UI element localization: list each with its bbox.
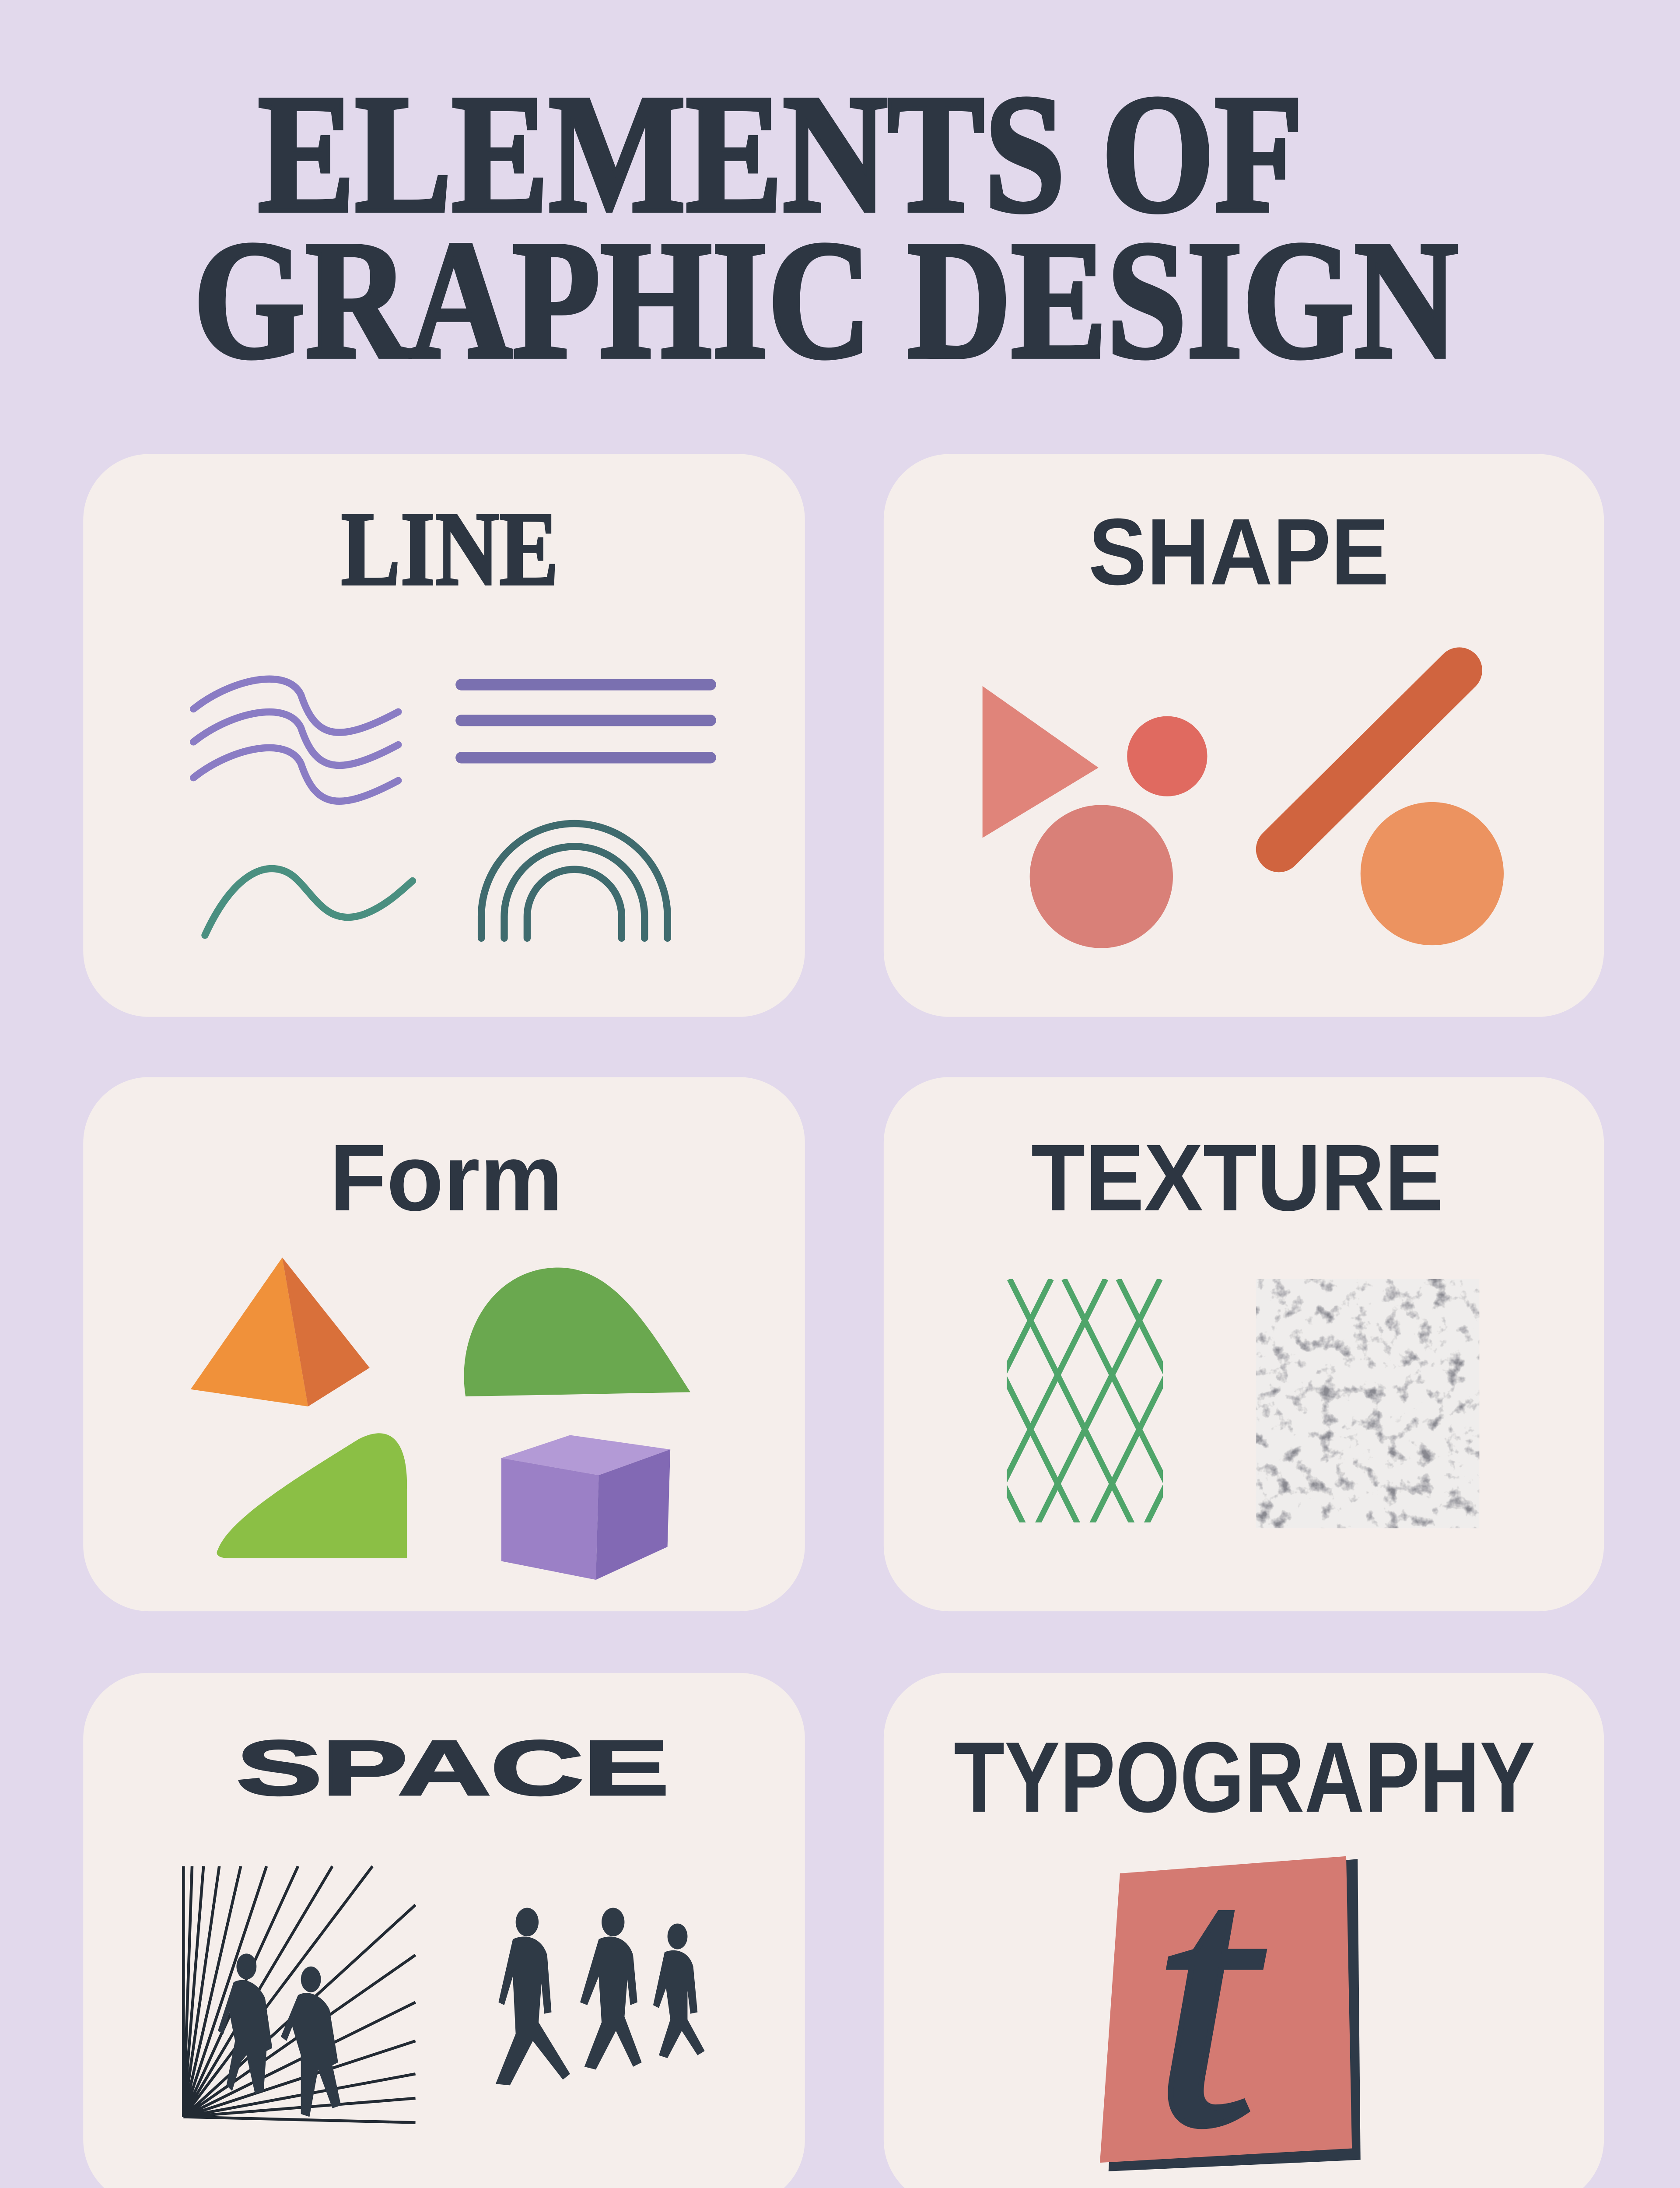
panel: line bbox=[83, 454, 805, 1017]
icon: wavy lines bbox=[193, 679, 398, 801]
icon: lattice bbox=[1007, 1279, 1163, 1523]
heading: space: SPACE bbox=[236, 1725, 669, 1811]
panel: typography bbox=[884, 1673, 1604, 2188]
icon: small circle bbox=[1127, 716, 1208, 796]
heading: shape: SHAPE bbox=[1088, 498, 1389, 604]
icon: arches bbox=[481, 824, 668, 938]
icon: grunge texture bbox=[1256, 1279, 1479, 1528]
icon: pill bbox=[1279, 670, 1460, 849]
icon: walking people bbox=[496, 1908, 705, 2085]
icon: wedge bbox=[217, 1433, 407, 1558]
panel: shape bbox=[884, 454, 1604, 1017]
icon: big circle bbox=[1030, 805, 1173, 948]
icon: perspective rays with figures bbox=[183, 1866, 416, 2123]
panel: space bbox=[83, 1673, 805, 2188]
icon: letter tile bbox=[1100, 1792, 1361, 2188]
panel: texture bbox=[847, 1077, 1604, 1611]
heading: form: Form bbox=[329, 1125, 563, 1231]
title: ELEMENTS OF bbox=[258, 60, 1303, 247]
heading: typography: TYPOGRAPHY bbox=[954, 1721, 1535, 1833]
icon: pyramid bbox=[191, 1258, 370, 1406]
icon: straight lines bbox=[461, 684, 710, 757]
heading: line: LINE bbox=[341, 490, 559, 607]
title bbox=[193, 60, 1458, 393]
icon: curve line bbox=[205, 869, 413, 935]
icon: orange circle bbox=[1361, 802, 1504, 945]
title: GRAPHIC DESIGN bbox=[193, 206, 1458, 393]
icon: triangle bbox=[983, 686, 1099, 838]
icon: cube bbox=[501, 1435, 670, 1580]
panel: form bbox=[83, 1077, 805, 1611]
heading: texture: TEXTURE bbox=[1031, 1125, 1444, 1231]
icon: dome bbox=[464, 1268, 690, 1396]
